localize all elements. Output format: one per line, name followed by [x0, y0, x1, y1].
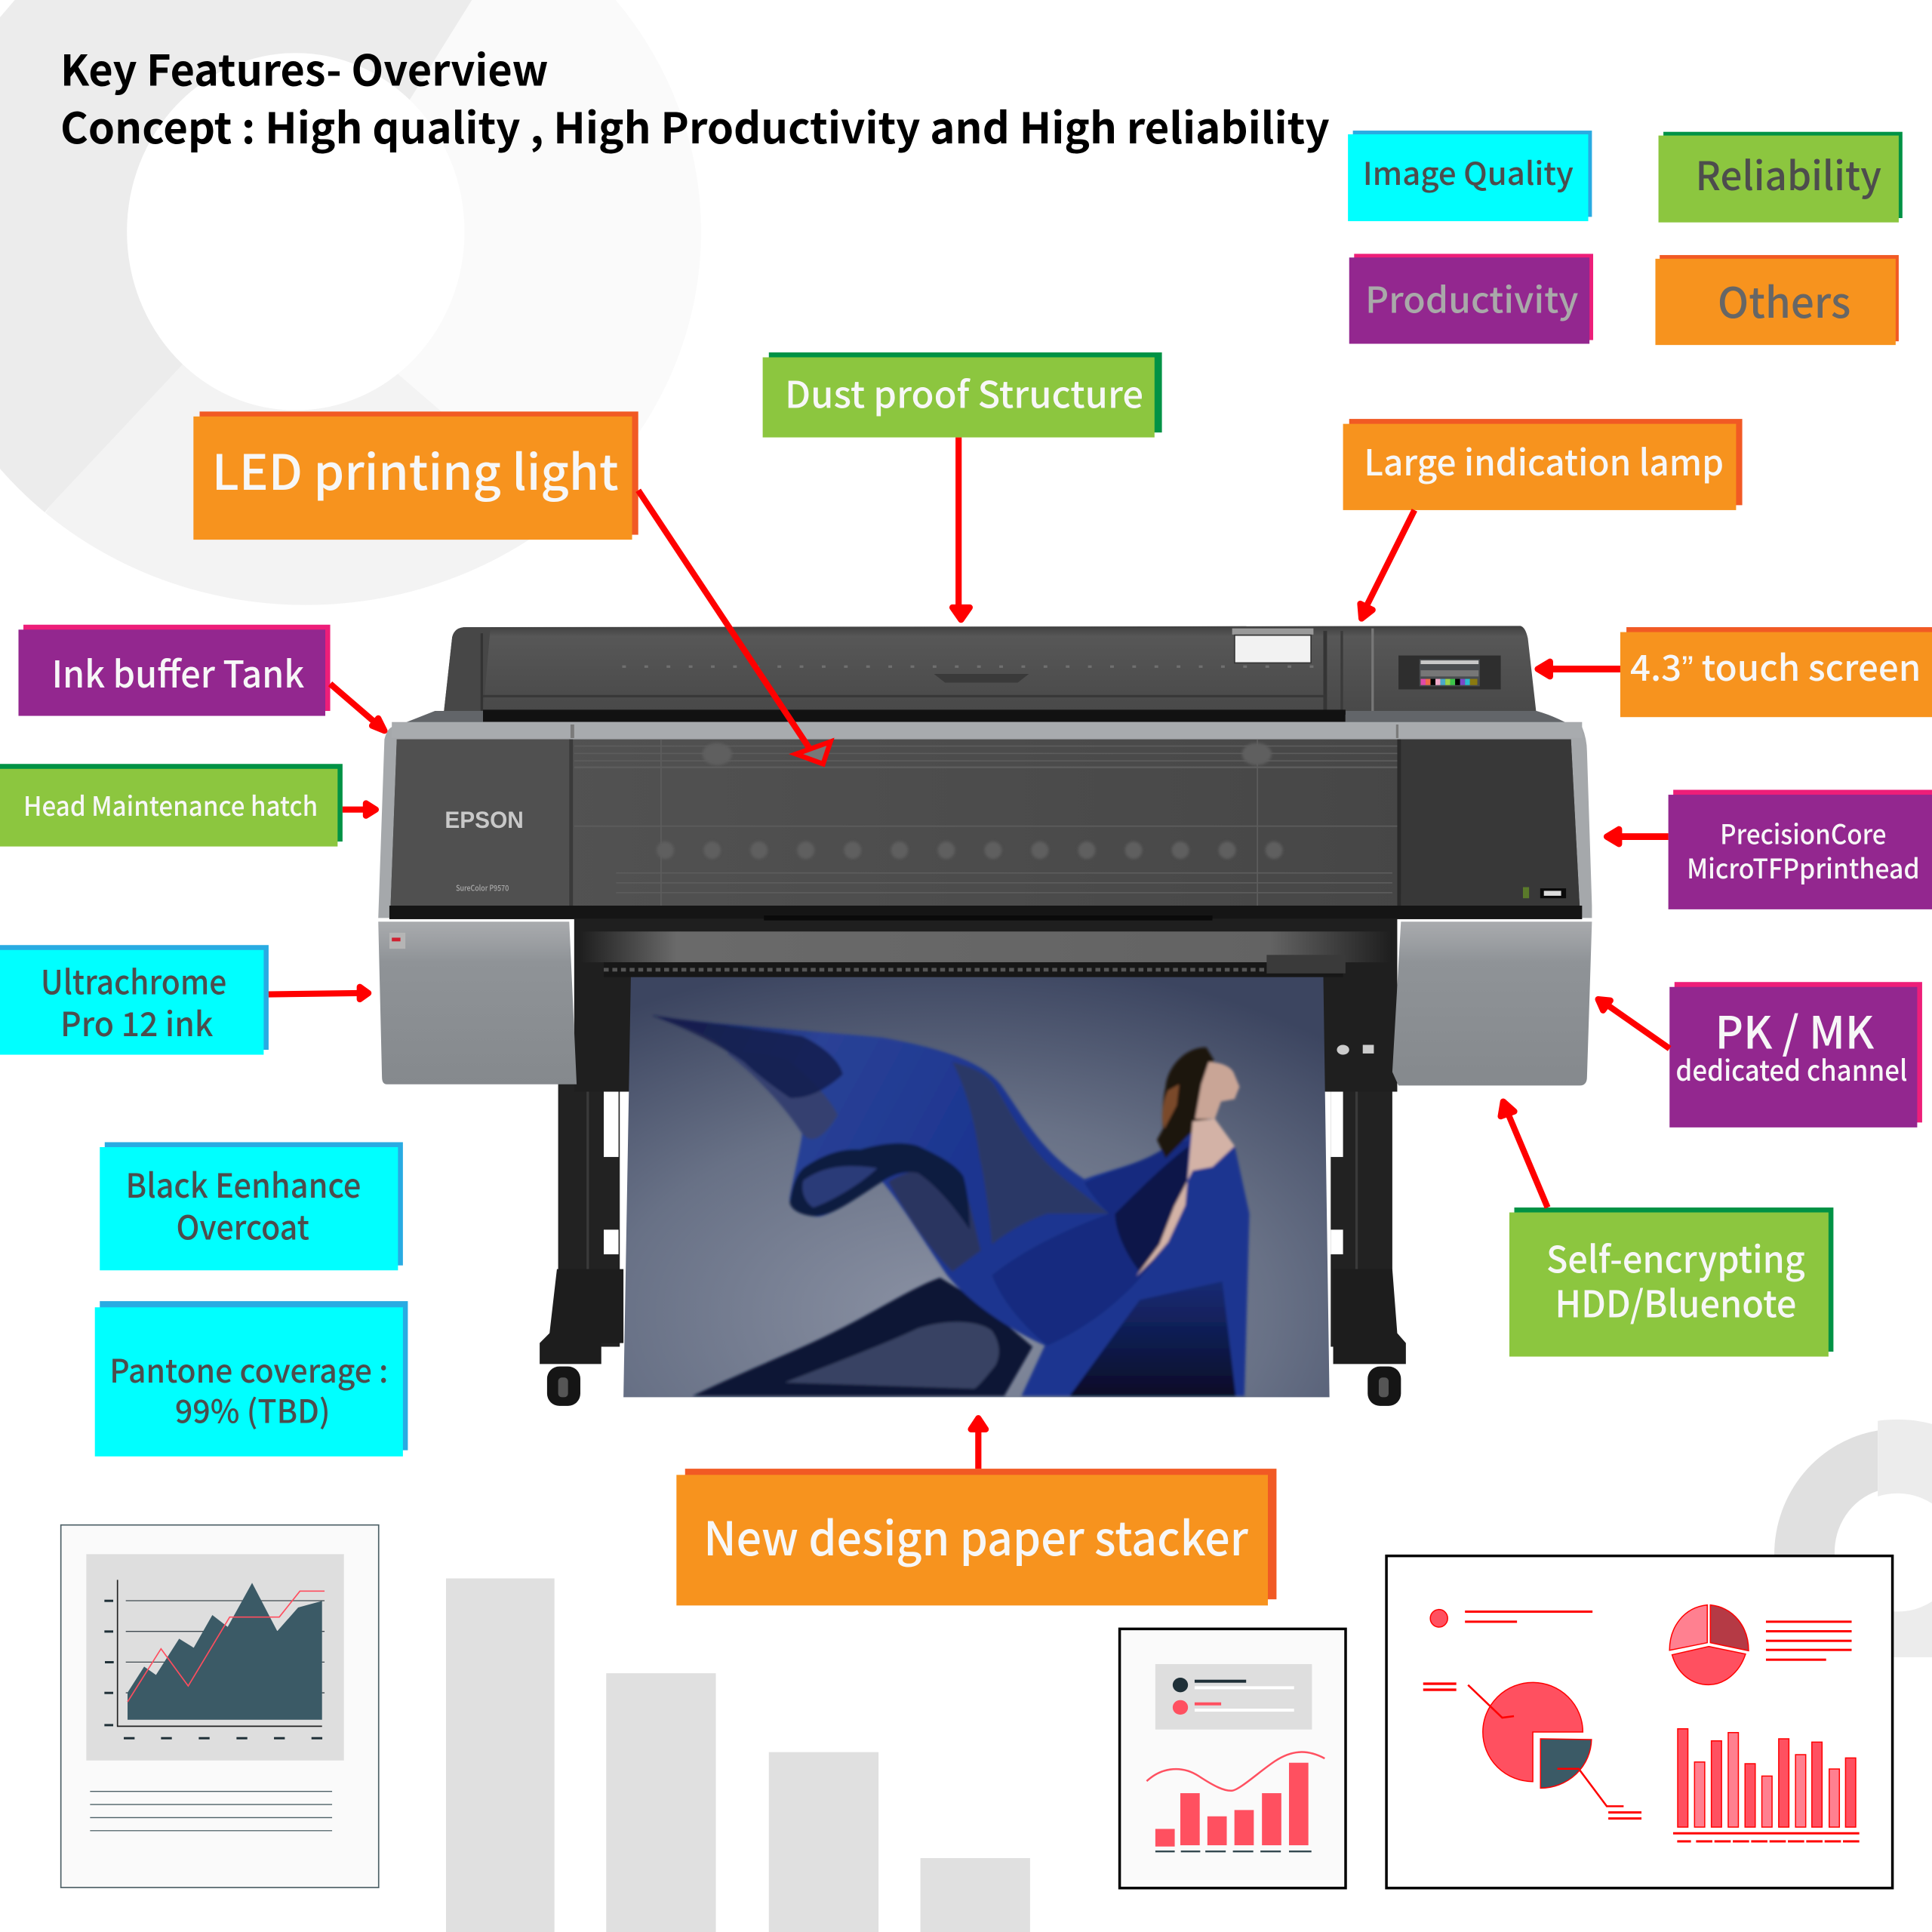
title	[60, 37, 1330, 156]
label: Self-encrypting HDD/Bluenote	[1509, 1208, 1833, 1357]
label: Ink buffer Tank	[18, 625, 331, 716]
background ring: top left	[0, 0, 528, 605]
printer: stand legs	[540, 1081, 1406, 1406]
legend: reliability	[1659, 132, 1903, 223]
label: PK / MK dedicated channel: PK / MK	[1715, 997, 1874, 1061]
legend: others: Others	[1718, 269, 1850, 330]
label: Ultrachrome Pro 12 ink	[0, 945, 269, 1055]
label: PrecisionCore MicroTFP printhead: MicroTFPprinthead	[1687, 848, 1920, 887]
large pie	[1483, 1682, 1592, 1788]
label: 4.3 inch touch screen	[1620, 627, 1932, 717]
label: LED printing light	[193, 411, 638, 540]
printer: side boxes	[378, 921, 1592, 1085]
poster: fabric trail	[693, 1278, 1032, 1396]
line series	[128, 1591, 325, 1702]
legend: productivity: Productivity	[1365, 272, 1579, 324]
arrow: self-encrypting	[1501, 1102, 1548, 1208]
poster: translucent folds	[952, 1062, 1109, 1244]
label: New design paper stacker	[676, 1469, 1276, 1605]
background bar chart	[446, 1578, 1030, 1932]
printer: centre cavity	[574, 915, 1397, 1092]
area series	[128, 1583, 322, 1720]
label: PrecisionCore MicroTFP printhead: PrecisionCore	[1720, 813, 1887, 852]
legend: reliability: Reliability	[1696, 145, 1881, 202]
arrow: touch screen	[1538, 662, 1620, 676]
arrow: PK/MK	[1598, 999, 1669, 1048]
small pie	[1669, 1605, 1749, 1684]
label: PK / MK dedicated channel: dedicated channel	[1675, 1048, 1907, 1089]
label: Ultrachrome Pro 12 ink: Pro 12 ink	[60, 998, 213, 1046]
background ring: bottom right	[1774, 1420, 1932, 1657]
label: PK / MK dedicated channel	[1669, 982, 1922, 1128]
legend: productivity	[1349, 254, 1593, 344]
printer: EPSON logo: EPSON	[445, 807, 524, 833]
label: Black Enhance Overcoat: Black Eenhance	[126, 1159, 361, 1208]
decorative document: legend and bars	[1120, 1629, 1346, 1888]
decorative document: pies and bars	[1386, 1556, 1893, 1888]
arrow: dust proof	[952, 438, 970, 620]
label: Ultrachrome Pro 12 ink: Ultrachrome	[41, 956, 226, 1004]
poster: main fabric	[652, 1015, 1250, 1396]
printer: black strip	[389, 906, 1582, 919]
title: Key Features- Overview	[60, 37, 549, 98]
label: 4.3 inch touch screen: 4.3” touch screen	[1630, 639, 1921, 691]
label: Pantone coverage: 99% (TBD)	[175, 1387, 331, 1433]
label: Black Enhance Overcoat	[100, 1142, 403, 1270]
printer: main body	[378, 709, 1592, 919]
arrow: paper stacker	[971, 1418, 986, 1469]
label: Large indication lamp	[1343, 419, 1743, 510]
poster: woman	[1157, 1048, 1214, 1158]
label: LED printing light: LED printing light	[212, 433, 619, 504]
label: Ink buffer Tank: Ink buffer Tank	[52, 645, 304, 699]
decorative document: area chart	[61, 1525, 379, 1887]
printer: top window	[1235, 635, 1311, 663]
legend: image quality: Image Quality	[1363, 149, 1574, 194]
legend: others	[1655, 255, 1899, 345]
label: Self-encrypting HDD/Bluenote: Self-encrypting	[1546, 1231, 1805, 1284]
label: Head Maintenance hatch	[0, 764, 343, 847]
title: Concept : High quality , High Productivity and High reliability	[60, 95, 1330, 156]
label: Large indication lamp: Large indication lamp	[1364, 434, 1724, 486]
label: Dust proof Structure	[763, 352, 1162, 438]
bars	[1678, 1729, 1856, 1827]
label: Pantone coverage	[95, 1301, 408, 1457]
printer: model label: SureColor P9570	[456, 882, 509, 894]
arrow: printhead	[1607, 829, 1669, 844]
legend: image quality	[1348, 131, 1592, 221]
label: Dust proof Structure: Dust proof Structure	[785, 365, 1143, 419]
poster: dress shadows	[992, 1140, 1189, 1346]
label: Self-encrypting HDD/Bluenote: HDD/Bluenote	[1555, 1275, 1796, 1328]
arrow: LED printing light	[638, 491, 830, 764]
printer: front panels	[391, 740, 1580, 906]
label: New design paper stacker: New design paper stacker	[703, 1501, 1248, 1569]
printer	[378, 626, 1592, 1406]
arrow: ultrachrome ink	[269, 987, 368, 999]
arrow: ink buffer tank	[331, 684, 384, 731]
label: Head Maintenance hatch: Head Maintenance hatch	[23, 786, 318, 824]
label: Pantone coverage: Pantone coverage :	[109, 1346, 388, 1392]
printer: top unit	[444, 626, 1537, 715]
printer: touch screen	[1398, 656, 1501, 689]
printed poster: woman in blue dress	[623, 977, 1330, 1397]
arrow: head maintenance	[343, 803, 376, 816]
arrow: indication lamp	[1360, 510, 1414, 619]
label: Black Enhance Overcoat: Overcoat	[176, 1201, 309, 1249]
label: PrecisionCore MicroTFP printhead	[1669, 790, 1932, 909]
